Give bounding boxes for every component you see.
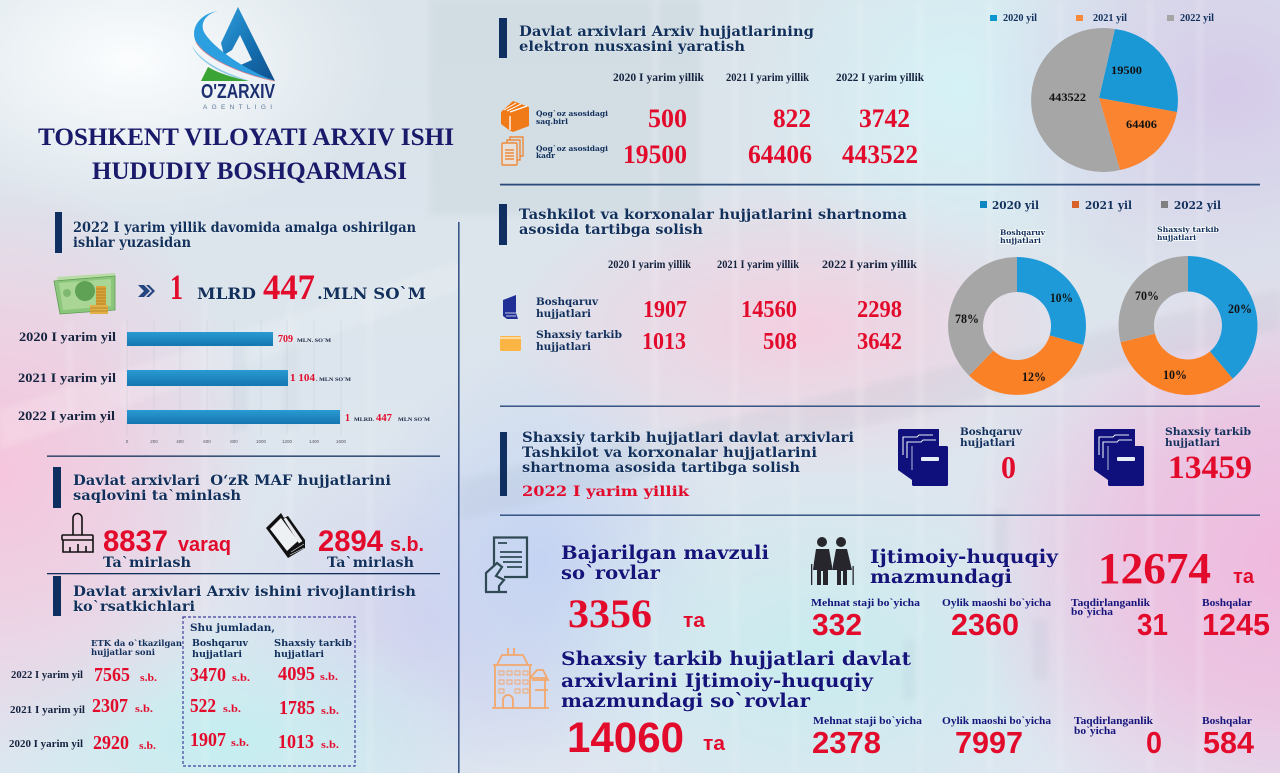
bar chart: 2020 I yarim yil bbox=[19, 329, 116, 344]
icon: book bbox=[266, 513, 305, 558]
table rows: s.b. bbox=[321, 739, 339, 751]
table rows bbox=[9, 663, 339, 754]
heading: digital copies bbox=[519, 24, 814, 55]
stat: Boshqaruv: hujjatlari bbox=[960, 437, 1015, 449]
bar chart: 400 bbox=[176, 439, 184, 444]
stat: thematic requests total bbox=[568, 591, 706, 636]
table rows: 7565 bbox=[94, 664, 130, 686]
bar chart: 709 bbox=[278, 334, 293, 345]
row labels: saq.birl bbox=[536, 117, 568, 126]
values: 2298 bbox=[857, 297, 902, 323]
stat: pages restored: Ta`mirlash bbox=[103, 555, 191, 571]
donut chart: Shaxsiy tarkib: 70% bbox=[1135, 288, 1159, 303]
logo: O'ZARXIV bbox=[201, 81, 276, 103]
table rows: s.b. bbox=[232, 672, 250, 684]
logo: AGENTLIGI bbox=[203, 104, 272, 111]
stat: volumes restored: s.b. bbox=[390, 534, 424, 556]
bar chart bbox=[18, 320, 431, 444]
stat: personnel requests total: 14060 bbox=[567, 714, 684, 762]
icon: brush bbox=[62, 514, 93, 552]
icon: chevrons bbox=[138, 285, 155, 297]
bar chart: 1200 bbox=[282, 439, 293, 444]
column headers: 2020 I yarim yillik bbox=[613, 70, 704, 84]
heading: preservation: saqlovini ta`minlash bbox=[73, 488, 241, 504]
breakdown: personnel: Oylik maoshi bo`yicha bbox=[942, 716, 1052, 727]
stat: Shaxsiy tarkib: 13459 bbox=[1168, 450, 1252, 486]
column headers bbox=[613, 70, 924, 84]
heading: preservation bbox=[73, 473, 391, 504]
panel: contract documents bbox=[499, 199, 1257, 395]
stat: Boshqaruv bbox=[960, 426, 1023, 485]
panel: personnel requests bbox=[492, 648, 1255, 762]
heading: development bbox=[73, 584, 416, 615]
total amount: .MLN SO`M bbox=[317, 284, 426, 303]
heading: social-legal bbox=[870, 546, 1059, 588]
donut chart: Boshqaruv: 12% bbox=[1022, 369, 1046, 384]
table rows: s.b. bbox=[223, 703, 241, 715]
breakdown: social-legal: Taqdirlanganlik bbox=[1071, 598, 1150, 609]
donut chart: Boshqaruv: hujjatlari bbox=[1000, 236, 1041, 245]
row labels: kadr bbox=[536, 151, 556, 160]
breakdown: personnel: Taqdirlanganlik bbox=[1074, 716, 1153, 727]
row labels: Shaxsiy tarkib bbox=[536, 329, 622, 341]
breakdown: social-legal: Boshqalar bbox=[1202, 598, 1252, 609]
values bbox=[623, 104, 918, 169]
bar chart: 2021 I yarim yil bbox=[18, 370, 116, 385]
bar chart: . MLN SO`M bbox=[316, 377, 352, 383]
icon: file drawer bbox=[898, 429, 948, 486]
column headers bbox=[608, 257, 917, 271]
heading: social-legal: Ijtimoiy-huquqiy bbox=[870, 546, 1059, 568]
table headers: Boshqaruv bbox=[192, 638, 248, 649]
table rows: 3470 bbox=[190, 664, 226, 686]
row labels: Qog`oz asosidagi bbox=[536, 144, 608, 153]
donut chart: Boshqaruv: 78% bbox=[955, 311, 979, 326]
heading: revenue: 2022 I yarim yillik davomida amalga oshirilgan bbox=[73, 220, 416, 236]
table rows: s.b. bbox=[231, 737, 249, 749]
table rows: 2020 I yarim yil bbox=[9, 739, 83, 750]
heading: personnel requests: mazmundagi so`rovlar bbox=[561, 690, 811, 712]
heading: digital copies: Davlat arxivlari Arxiv hujjatlarining bbox=[519, 24, 814, 40]
icon: file drawer bbox=[1094, 429, 1144, 486]
stat: thematic requests total: 3356 bbox=[568, 591, 652, 636]
stat: Shaxsiy tarkib bbox=[1165, 426, 1252, 486]
heading: contract documents bbox=[519, 207, 907, 238]
donut chart: Shaxsiy tarkib bbox=[1119, 225, 1257, 395]
icon: elderly couple bbox=[811, 537, 854, 585]
donut chart: Boshqaruv: 10% bbox=[1050, 290, 1073, 305]
table rows: 2307 bbox=[92, 695, 128, 717]
pie chart: 443522 bbox=[1049, 90, 1086, 104]
heading: personnel documents bbox=[522, 430, 854, 476]
legend: donuts bbox=[980, 199, 1221, 212]
row labels: Qog`oz asosidagi bbox=[536, 109, 608, 118]
icon: building bbox=[492, 648, 549, 708]
table rows: 1907 bbox=[190, 729, 226, 751]
dashed box bbox=[183, 617, 355, 766]
legend: pie bbox=[990, 13, 1214, 24]
panel: development indicators bbox=[9, 576, 416, 766]
column headers: 2020 I yarim yillik bbox=[608, 257, 691, 271]
donut chart: Shaxsiy tarkib: 10% bbox=[1163, 367, 1187, 382]
total amount: MLRD bbox=[197, 284, 256, 303]
bar chart: 0 bbox=[126, 439, 129, 444]
values: 19500 bbox=[623, 140, 687, 169]
table rows: 1785 bbox=[279, 697, 315, 719]
heading: preservation: Davlat arxivlari O‘zR MAF hujjatlarini bbox=[73, 473, 391, 489]
column headers: 2022 I yarim yillik bbox=[822, 257, 917, 271]
bar chart: MLN. SO`M bbox=[297, 338, 332, 344]
breakdown: personnel: bo`yicha bbox=[1074, 726, 1117, 737]
icon: orange books bbox=[501, 101, 529, 132]
donut chart: Shaxsiy tarkib: hujjatlari bbox=[1157, 233, 1196, 242]
breakdown: personnel: 584 bbox=[1203, 725, 1255, 760]
bar chart: 2022 I yarim yil bbox=[18, 408, 115, 423]
logo bbox=[192, 7, 276, 111]
column headers: 2021 I yarim yillik bbox=[726, 70, 809, 84]
row labels: hujjatlari bbox=[536, 341, 591, 353]
donut chart: Boshqaruv bbox=[948, 228, 1086, 395]
heading: thematic requests: so`rovlar bbox=[561, 562, 661, 584]
values: 508 bbox=[763, 329, 797, 355]
bar chart: MLRD. bbox=[354, 417, 375, 423]
heading: personnel requests: arxivlarini Ijtimoiy-huquqiy bbox=[561, 670, 874, 692]
table rows: s.b. bbox=[321, 705, 339, 717]
bar chart: 1400 bbox=[309, 439, 320, 444]
heading: thematic requests: Bajarilgan mavzuli bbox=[561, 542, 769, 564]
bar chart: 1600 bbox=[336, 439, 347, 444]
table headers bbox=[91, 622, 352, 660]
total amount: 1 bbox=[170, 267, 183, 307]
panel: personnel documents bbox=[500, 426, 1252, 500]
heading: revenue bbox=[73, 220, 416, 251]
icon: yellow folder bbox=[500, 336, 521, 351]
breakdown: personnel bbox=[812, 716, 1255, 760]
legend: donuts: 2020 yil bbox=[992, 199, 1039, 212]
panel: thematic requests bbox=[485, 538, 769, 636]
heading: contract documents: Tashkilot va korxonalar hujjatlarini shartnoma bbox=[519, 207, 907, 223]
bar chart: 1 104 bbox=[290, 373, 315, 384]
table rows: 1013 bbox=[278, 731, 314, 753]
table rows: s.b. bbox=[135, 703, 153, 715]
bar chart: 447 bbox=[376, 413, 392, 424]
values: 500 bbox=[648, 104, 687, 133]
values: 64406 bbox=[748, 140, 812, 169]
table headers: Shu jumladan, bbox=[190, 622, 275, 634]
stat: Shaxsiy tarkib: hujjatlari bbox=[1165, 437, 1220, 449]
heading: social-legal: mazmundagi bbox=[870, 566, 1012, 588]
breakdown: social-legal: Mehnat staji bo`yicha bbox=[811, 598, 921, 609]
bar chart: 1000 bbox=[256, 439, 267, 444]
table rows: 4095 bbox=[278, 663, 315, 685]
title: TOSHKENT VILOYATI ARXIV ISHI bbox=[38, 124, 454, 151]
total amount bbox=[170, 267, 426, 307]
column headers: 2021 I yarim yillik bbox=[717, 257, 799, 271]
breakdown: personnel: 7997 bbox=[955, 725, 1023, 760]
stat: Boshqaruv: Boshqaruv bbox=[960, 426, 1023, 438]
table rows: s.b. bbox=[140, 672, 157, 684]
title bbox=[38, 124, 454, 185]
breakdown: social-legal: Oylik maoshi bo`yicha bbox=[942, 598, 1052, 609]
table rows: s.b. bbox=[320, 671, 338, 683]
pie chart bbox=[1031, 28, 1178, 172]
values: 3742 bbox=[859, 104, 910, 133]
donut chart: Shaxsiy tarkib: 20% bbox=[1228, 301, 1252, 316]
stat: personnel requests total: та bbox=[703, 733, 726, 755]
stat: social-legal total: 12674 bbox=[1098, 544, 1211, 593]
table rows: s.b. bbox=[139, 740, 156, 752]
values: 443522 bbox=[842, 140, 918, 169]
values bbox=[642, 297, 902, 355]
values: 14560 bbox=[741, 297, 797, 323]
heading: revenue: ishlar yuzasidan bbox=[73, 235, 191, 251]
breakdown: social-legal: 2360 bbox=[951, 607, 1019, 642]
stat: social-legal total: та bbox=[1233, 566, 1255, 588]
heading: personnel requests: Shaxsiy tarkib hujjatlari davlat bbox=[561, 648, 911, 670]
bar chart: 200 bbox=[150, 439, 158, 444]
breakdown: social-legal: bo`yicha bbox=[1071, 607, 1114, 618]
icon: orange documents bbox=[502, 137, 523, 165]
values: 822 bbox=[773, 104, 811, 133]
total amount: 447 bbox=[263, 267, 315, 307]
heading: thematic requests bbox=[561, 542, 769, 584]
row labels: Boshqaruv bbox=[536, 296, 599, 308]
row labels bbox=[536, 109, 608, 160]
pie chart: 19500 bbox=[1111, 63, 1142, 77]
breakdown: personnel: 0 bbox=[1146, 725, 1162, 760]
stat: volumes restored bbox=[318, 525, 424, 571]
table rows: 2022 I yarim yil bbox=[11, 670, 83, 681]
breakdown: social-legal bbox=[811, 598, 1270, 642]
breakdown: personnel: 2378 bbox=[812, 725, 881, 760]
heading: digital copies: elektron nusxasini yaratish bbox=[519, 39, 745, 55]
title: HUDUDIY BOSHQARMASI bbox=[92, 158, 407, 185]
subheading: period: 2022 I yarim yillik bbox=[522, 484, 689, 500]
panel: social-legal requests bbox=[811, 537, 1270, 642]
heading: personnel documents: Shaxsiy tarkib hujjatlari davlat arxivlari bbox=[522, 430, 854, 446]
stat: thematic requests total: та bbox=[683, 610, 706, 632]
stat: pages restored: 8837 bbox=[103, 525, 168, 558]
table rows: 2021 I yarim yil bbox=[10, 705, 85, 716]
row labels bbox=[536, 296, 622, 353]
column headers: 2022 I yarim yillik bbox=[836, 70, 924, 84]
table headers: hujjatlar soni bbox=[91, 648, 156, 658]
values: 1907 bbox=[643, 297, 687, 323]
breakdown: social-legal: 332 bbox=[812, 607, 862, 642]
panel: digital copies bbox=[499, 13, 1214, 172]
heading: contract documents: asosida tartibga solish bbox=[519, 222, 703, 238]
stat: pages restored: varaq bbox=[178, 534, 231, 556]
legend: pie: 2021 yil bbox=[1093, 13, 1127, 24]
breakdown: personnel: Boshqalar bbox=[1202, 716, 1252, 727]
bar chart: 600 bbox=[203, 439, 211, 444]
legend: donuts: 2021 yil bbox=[1085, 199, 1132, 212]
panel: preservation bbox=[53, 467, 424, 571]
icon: blue binder bbox=[503, 295, 518, 319]
icon: hand with document bbox=[485, 538, 527, 592]
pie chart: 64406 bbox=[1126, 117, 1157, 131]
stat: volumes restored: Ta`mirlash bbox=[327, 555, 414, 571]
breakdown: social-legal: 1245 bbox=[1202, 607, 1270, 642]
heading: development: Davlat arxivlari Arxiv ishini rivojlantirish bbox=[73, 584, 416, 600]
donut chart: Shaxsiy tarkib: Shaxsiy tarkib bbox=[1157, 225, 1219, 234]
panel: revenue bbox=[18, 212, 431, 444]
icon: money bbox=[54, 273, 115, 314]
legend: donuts: 2022 yil bbox=[1174, 199, 1221, 212]
values: 3642 bbox=[857, 329, 902, 355]
stat: pages restored bbox=[103, 525, 231, 571]
stat: Shaxsiy tarkib: Shaxsiy tarkib bbox=[1165, 426, 1251, 438]
breakdown: social-legal: 31 bbox=[1137, 607, 1168, 642]
heading: personnel requests bbox=[561, 648, 911, 712]
table rows: 2920 bbox=[93, 732, 129, 754]
bar chart: 1 bbox=[345, 413, 350, 424]
bar chart: MLN SO`M bbox=[398, 417, 431, 423]
legend: pie: 2022 yil bbox=[1180, 13, 1214, 24]
table headers: hujjatlari bbox=[274, 649, 324, 660]
values: 1013 bbox=[642, 329, 686, 355]
heading: development: ko`rsatkichlari bbox=[73, 599, 195, 615]
heading: personnel documents: Tashkilot va korxonalar hujjatlarini bbox=[522, 445, 817, 461]
row labels: hujjatlari bbox=[536, 308, 591, 320]
donut chart: Boshqaruv: Boshqaruv bbox=[1000, 228, 1046, 237]
breakdown: personnel: Mehnat staji bo`yicha bbox=[813, 716, 923, 727]
table rows: 522 bbox=[190, 695, 216, 717]
heading: personnel documents: shartnoma asosida tartibga solish bbox=[522, 460, 800, 476]
stat: volumes restored: 2894 bbox=[318, 525, 383, 558]
table headers: ETK da o`tkazilgan bbox=[91, 638, 182, 649]
legend: pie: 2020 yil bbox=[1003, 13, 1037, 24]
bar chart: 800 bbox=[230, 439, 238, 444]
table headers: hujjatlari bbox=[192, 649, 242, 660]
table headers: Shaxsiy tarkib bbox=[274, 638, 352, 649]
stat: Boshqaruv: 0 bbox=[1001, 449, 1016, 485]
